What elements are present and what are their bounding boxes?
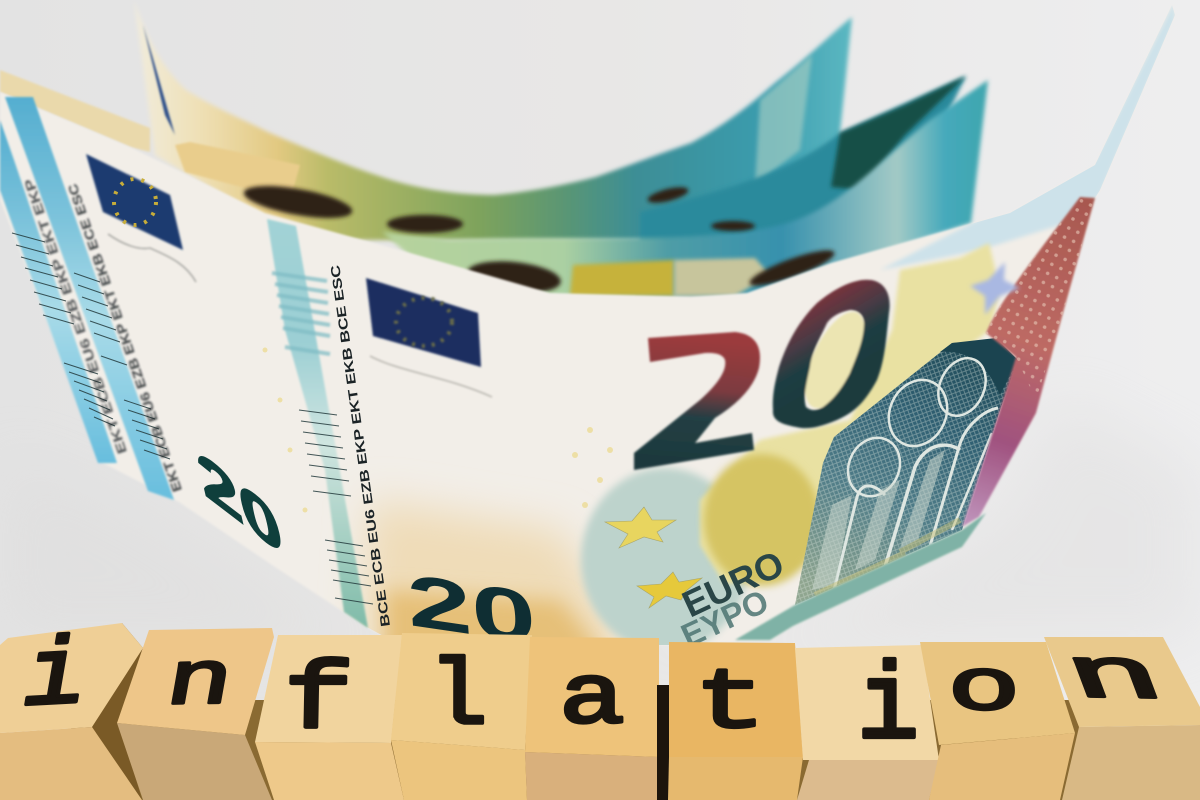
big 20: [634, 280, 890, 470]
lower teal edge: [735, 513, 986, 640]
block underlay: [120, 700, 1080, 800]
block: n: [117, 628, 274, 800]
block: i: [795, 645, 939, 800]
signatures: [108, 234, 196, 282]
block: t: [668, 642, 803, 800]
front note: [382, 80, 988, 296]
cream sliver: [175, 142, 300, 200]
dark side face: [70, 623, 143, 800]
star 1: [605, 507, 676, 548]
microtext strips: EKT ECB EU6 EZB EKP EKT EKP: [21, 176, 130, 456]
yellow field: [700, 243, 1000, 585]
block: o: [920, 642, 1075, 800]
stars: [605, 507, 702, 608]
EU flag right: [366, 278, 481, 367]
small 20 bottom: 20: [404, 558, 539, 660]
microtext strips: [21, 176, 393, 628]
microtext strips: BCE ECB EU6 EZB EKP EKT EKB BCE ESC: [327, 263, 393, 628]
dark gap: [657, 685, 670, 800]
blocks: [0, 623, 1200, 800]
pale blue top strip: [880, 0, 1175, 270]
block: l: [391, 633, 532, 800]
pale pane accents: [812, 450, 945, 590]
banknote body: [0, 5, 1175, 645]
window illustration: [795, 338, 1018, 605]
rear note pale section: [755, 55, 812, 185]
EURO text: EURO: [676, 543, 790, 625]
block: t: t: [694, 656, 766, 753]
block: n: [1044, 637, 1200, 800]
back banknotes: [134, 0, 988, 297]
red bridge pattern: [962, 197, 1095, 527]
block: i: i: [857, 647, 919, 770]
block: a: [525, 637, 659, 800]
microtext strips: EKT ECB EU6 EZB EKP EKT EKB ECE ESC: [65, 181, 185, 494]
hologram blue patch: [581, 468, 749, 652]
stripe rungs: [272, 273, 330, 354]
block: n: n: [159, 640, 239, 727]
block: f: f: [282, 648, 355, 756]
yellow patch: [570, 260, 674, 296]
dark holes: [242, 180, 837, 297]
star 2: [637, 572, 702, 608]
top-left fold edge: [0, 70, 150, 152]
block: n: n: [1054, 637, 1176, 720]
main banknote: EYPO: [675, 582, 774, 654]
yellow dots: [262, 348, 613, 512]
block: o: o: [948, 647, 1020, 733]
small 20 left: 20: [190, 435, 290, 572]
block: i: [0, 623, 143, 800]
rear note: [134, 0, 852, 240]
left blue stripes: [0, 97, 368, 628]
ochre circle: [704, 454, 820, 586]
block: l: l: [428, 646, 488, 751]
beige patch: [674, 258, 770, 296]
block: f: [255, 635, 404, 800]
dark green wedge: [831, 76, 966, 190]
blue star: [970, 262, 1020, 315]
block: i: i: [14, 623, 94, 734]
note shadow: [0, 400, 1200, 650]
block: a: a: [559, 651, 625, 748]
security lines: [12, 233, 373, 604]
far left note blue strip: [143, 25, 175, 135]
warm lower shading: [360, 500, 640, 660]
middle blue note: [640, 76, 966, 250]
EU flag left: [86, 154, 183, 250]
